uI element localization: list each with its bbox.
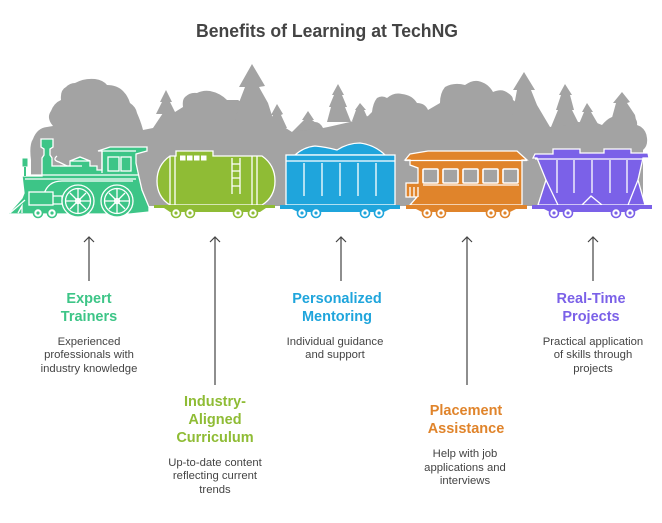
text block: Expert Trainers: Experienced <box>58 336 120 348</box>
text block: Industry-Aligned Curriculum: trends <box>199 484 231 496</box>
arrow: Personalized Mentoring <box>336 237 346 281</box>
text block: Expert Trainers: professionals with <box>44 349 134 361</box>
text block: Personalized Mentoring: Individual guidance <box>287 336 383 348</box>
text block: Placement Assistance: applications and <box>424 462 506 474</box>
whistle <box>55 156 67 166</box>
tank car: Industry-Aligned Curriculum <box>154 151 275 218</box>
hopper car: Personalized Mentoring <box>280 143 400 218</box>
text block: Expert Trainers: Expert <box>66 291 112 307</box>
text block: Expert Trainers: industry knowledge <box>41 363 137 375</box>
text block: Placement Assistance <box>424 403 506 487</box>
text block: Industry-Aligned Curriculum <box>168 394 263 496</box>
boiler detail <box>44 181 133 194</box>
text block: Expert Trainers <box>41 291 137 375</box>
passenger car: Placement Assistance <box>405 151 527 218</box>
title: Benefits of Learning at TechNG <box>196 21 458 41</box>
driving wheels <box>62 185 133 217</box>
text block: Real-Time Projects: Real-Time <box>556 291 626 307</box>
arrow: Placement Assistance <box>462 237 472 385</box>
text block: Personalized Mentoring: Personalized <box>292 291 382 307</box>
text block: Placement Assistance: Assistance <box>428 421 504 437</box>
text block: Personalized Mentoring <box>287 291 383 361</box>
text block: Real-Time Projects: Practical application <box>543 336 643 348</box>
arrow: Real-Time Projects <box>588 237 598 281</box>
arrow: Expert Trainers <box>84 237 94 281</box>
text block: Real-Time Projects: Projects <box>562 309 620 325</box>
text block: Industry-Aligned Curriculum: Up-to-date content <box>168 457 263 469</box>
text block: Industry-Aligned Curriculum: reflecting current <box>173 470 258 482</box>
cab windows <box>108 157 131 171</box>
grey forest and smoke silhouette <box>30 64 647 206</box>
text block: Industry-Aligned Curriculum: Aligned <box>188 412 242 428</box>
text block: Real-Time Projects: of skills through <box>554 349 632 361</box>
pilot wheels <box>34 208 56 218</box>
locomotive: Expert Trainers <box>8 139 149 218</box>
arrow: Industry-Aligned Curriculum <box>210 237 220 385</box>
text block: Placement Assistance: interviews <box>440 475 490 487</box>
text block: Industry-Aligned Curriculum: Industry- <box>184 394 246 410</box>
text block: Industry-Aligned Curriculum: Curriculum <box>176 430 254 446</box>
grain hopper car: Real-Time Projects <box>532 149 652 218</box>
text block: Real-Time Projects: projects <box>573 363 613 375</box>
text block: Placement Assistance: Placement <box>430 403 502 419</box>
text block: Personalized Mentoring: Mentoring <box>302 309 372 325</box>
lamp <box>22 158 28 167</box>
text block: Expert Trainers: Trainers <box>61 309 117 325</box>
text block: Personalized Mentoring: and support <box>305 349 366 361</box>
text block: Real-Time Projects <box>543 291 643 375</box>
text block: Placement Assistance: Help with job <box>433 448 497 460</box>
